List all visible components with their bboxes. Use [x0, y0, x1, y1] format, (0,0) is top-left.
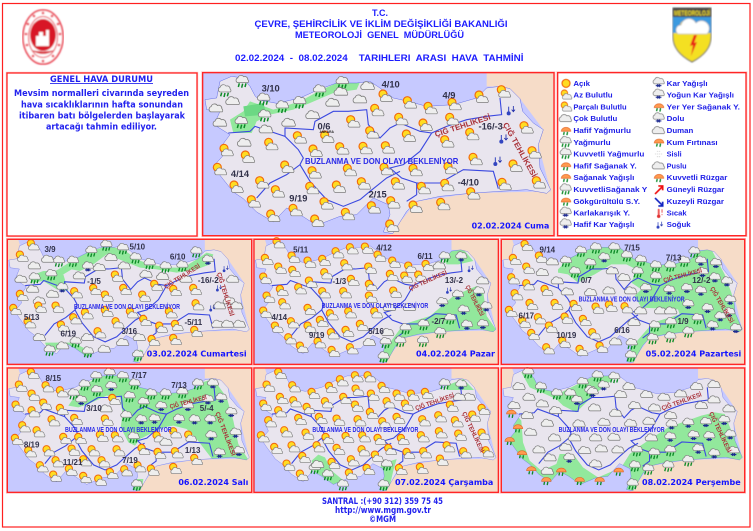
date label: 06.02.2024 Salı [178, 478, 249, 487]
map labels: 1/9 [677, 317, 689, 326]
text block: forecast summary: hava sıcaklıklarının hafta sonundan [21, 100, 183, 110]
map labels [312, 390, 487, 454]
map labels: -5/11 [184, 318, 203, 327]
map labels: ÇIĞ TEHLİKESİ [414, 390, 455, 412]
title lines: T.C. [372, 8, 388, 19]
map labels: 7/19 [122, 456, 138, 465]
map labels: 5/10 [130, 242, 146, 251]
legend labels: Hafif Kar Yağışlı [573, 220, 634, 229]
map labels: 3/16 [122, 327, 138, 336]
legend labels: Sıcak [667, 208, 687, 217]
title lines: METEOROLOJİ GENEL MÜDÜRLÜĞÜ [295, 29, 464, 41]
map labels: -16/-2 [198, 276, 219, 285]
date label: 02.02.2024 Cuma [472, 221, 549, 230]
legend labels [573, 79, 740, 229]
map labels: BUZLANMA VE DON OLAYI BEKLENİYOR [312, 426, 418, 434]
date label: 04.02.2024 Pazar [416, 349, 495, 358]
map: Turkey with rain area [9, 240, 249, 363]
map labels: 4/12 [376, 243, 392, 252]
map labels: 9/19 [289, 194, 307, 204]
footer contact [322, 497, 443, 525]
map: Turkey with rain area [256, 368, 496, 492]
header [23, 8, 711, 64]
map labels: ÇIĞ TEHLİKESİ [464, 284, 487, 317]
panel: map 06.02.2024 [7, 368, 252, 492]
text block: forecast summary: Mevsim normalleri civarında seyreden [14, 89, 189, 99]
text block: forecast summary: itibaren batı bölgelerden başlayarak [19, 112, 185, 122]
map labels: -2/7 [431, 317, 446, 326]
map labels: 9/19 [309, 331, 325, 340]
weather icons [11, 368, 245, 491]
map labels: ÇIĞ TEHLİKESİ [660, 389, 703, 412]
date label: 03.02.2024 Cumartesi [147, 349, 247, 358]
map: Turkey with rain and snow area [256, 238, 498, 363]
map labels: 5/11 [293, 245, 309, 254]
map labels: ÇIĞ TEHLİKESİ [662, 265, 703, 284]
map labels: ÇIĞ TEHLİKESİ [215, 271, 237, 317]
legend labels: Duman [667, 126, 694, 135]
map labels: 4/10 [382, 80, 400, 90]
footer contact: http://www.mgm.gov.tr [335, 506, 432, 516]
map labels: ÇIĞ TEHLİKESİ [707, 410, 734, 454]
legend labels: Sağanak Yağışlı [573, 173, 634, 182]
map labels: 6/17 [519, 311, 535, 320]
map labels: 5/16 [368, 327, 384, 336]
title lines: ÇEVRE, ŞEHİRCİLİK VE İKLİM DEĞİŞİKLİĞİ BAKANLIĞI [254, 18, 508, 30]
map labels [272, 243, 487, 340]
map labels: 2/15 [369, 190, 387, 200]
title lines [235, 8, 524, 64]
map labels: ÇIĞ TEHLİKESİ [162, 261, 202, 291]
legend labels: Kuvvetli Rüzgar [667, 173, 727, 182]
map labels: 8/15 [46, 374, 62, 383]
icon: meteorology shield [673, 8, 711, 62]
panel: general weather text [7, 73, 197, 236]
legend labels: Gökgürültülü S.Y. [573, 197, 640, 206]
map labels: BUZLANMA VE DON OLAYI BEKLENİYOR [559, 426, 665, 434]
map labels: 13/-2 [445, 276, 464, 285]
map labels: 10/19 [556, 331, 577, 340]
map labels: 7/15 [624, 243, 640, 252]
map: Turkey with rain and snow area [9, 368, 250, 492]
map labels: 3/9 [44, 245, 56, 254]
legend icons [559, 77, 664, 229]
weather icons [257, 368, 494, 491]
map labels: 3/10 [86, 404, 102, 413]
map labels: 6/11 [417, 252, 433, 261]
map labels: BUZLANMA VE DON OLAYI BEKLENİYOR [579, 295, 685, 303]
map labels: BUZLANMA VE DON OLAYI BEKLENİYOR [322, 302, 428, 310]
map labels [24, 371, 238, 467]
legend labels: Kar Yağışlı [667, 79, 708, 88]
map labels: 9/14 [540, 245, 556, 254]
map labels: 5/-4 [200, 404, 214, 413]
map labels: 4/14 [272, 313, 288, 322]
weather icons [209, 75, 546, 231]
map labels: BUZLANMA VE DON OLAYI BEKLENİYOR [65, 426, 172, 434]
map labels: 7/13 [666, 253, 682, 262]
legend labels: Hafif Yağmurlu [573, 126, 631, 135]
legend labels: Soğuk [667, 220, 691, 229]
map: Turkey with rain and snow area [503, 240, 745, 363]
panel: map 08.02.2024 [501, 367, 745, 492]
map labels [559, 389, 734, 454]
text block: forecast summary [14, 89, 189, 132]
map labels: 11/21 [63, 458, 83, 467]
legend labels: Puslu [667, 161, 687, 170]
map labels: BUZLANMA VE DON OLAYI BEKLENİYOR [305, 156, 458, 166]
map labels: 0/6 [318, 121, 330, 131]
weather icons [505, 367, 739, 490]
panel: main map 02.02.2024 [203, 73, 554, 236]
map labels: 7/13 [171, 381, 187, 390]
map labels: 3/10 [262, 84, 280, 94]
legend labels: Az Bulutlu [573, 90, 613, 99]
title lines: 02.02.2024 - 08.02.2024 TARIHLERI ARASI HAVA TAHMİNİ [235, 53, 524, 64]
date label: 08.02.2024 Perşembe [642, 478, 741, 487]
date label: 07.02.2024 Çarşamba [395, 478, 493, 487]
panel: legend [558, 73, 746, 236]
legend labels: Kum Fırtınası [667, 138, 718, 147]
text block: forecast summary: artacağı tahmin ediliyor. [46, 122, 157, 132]
date label: 05.02.2024 Pazartesi [646, 349, 742, 358]
legend labels: Yer Yer Sağanak Y. [667, 102, 740, 111]
legend labels: Parçalı Bulutlu [573, 102, 627, 111]
legend labels: Hafif Sağanak Y. [573, 161, 637, 170]
map labels: 8/19 [24, 440, 40, 449]
map labels: 5/13 [24, 313, 40, 322]
legend labels: KuvvetliSağanak Y [573, 185, 647, 194]
map labels: -4/10 [458, 177, 479, 187]
weather icons [260, 238, 492, 363]
map labels: ÇIĞ TEHLİKESİ [169, 392, 208, 411]
map labels [24, 242, 237, 338]
map labels: ÇIĞ TEHLİKESİ [407, 268, 448, 293]
weather icons [10, 240, 245, 361]
panel: map 04.02.2024 [254, 238, 498, 364]
map labels: ÇIĞ TEHLİKESİ [501, 121, 539, 179]
map labels [519, 243, 736, 340]
icon: meteorology shield: METEOROLOJİ [674, 10, 710, 18]
map labels: BUZLANMA VE DON OLAYI BEKLENİYOR [74, 303, 180, 311]
map labels: -16/-3 [478, 122, 503, 132]
footer contact: ©MGM [369, 515, 396, 525]
legend labels: Dolu [667, 114, 685, 123]
map labels: 4/14 [231, 169, 250, 179]
legend labels: Yağmurlu [573, 138, 611, 147]
map labels: ÇIĞ TEHLİKESİ [434, 112, 492, 139]
legend labels: Kuzeyli Rüzgar [667, 197, 724, 206]
map labels: -1/5 [87, 277, 101, 286]
legend labels: Açık [573, 79, 591, 88]
footer contact: SANTRAL :(+90 312) 359 75 45 [322, 497, 443, 507]
map: Turkey with rain and snow area [503, 367, 745, 492]
legend labels: Karlakarışık Y. [573, 208, 630, 217]
legend labels: Sisli [667, 149, 682, 158]
weather icons [505, 240, 742, 362]
panel: map 05.02.2024 [501, 239, 745, 364]
map labels: ÇIĞ TEHLİKESİ [213, 410, 238, 457]
map labels: 1/13 [185, 446, 201, 455]
panel: map 03.02.2024 [7, 239, 252, 364]
map labels: ÇIĞ TEHLİKESİ [460, 410, 487, 454]
map labels: ÇIĞ TEHLİKESİ [708, 285, 736, 325]
map labels: 12/-2 [692, 276, 711, 285]
legend labels: Kuvvetli Yağmurlu [573, 149, 645, 158]
map labels: -1/3 [332, 277, 347, 286]
icon: ministry emblem [23, 10, 63, 64]
heading: general weather: GENEL HAVA DURUMU [50, 75, 153, 85]
map labels: 6/19 [61, 329, 77, 338]
map labels: 6/16 [614, 326, 630, 335]
map labels [231, 80, 539, 204]
map: Turkey [205, 75, 551, 234]
legend labels: Güneyli Rüzgar [667, 185, 724, 194]
map labels: 4/9 [443, 90, 455, 100]
map labels: 0/7 [581, 276, 592, 285]
map labels: 6/10 [170, 252, 186, 261]
legend labels: Çok Bulutlu [573, 114, 618, 123]
map labels: ANKARA [319, 130, 334, 134]
map labels: 7/17 [131, 371, 147, 380]
legend labels: Yoğun Kar Yağışlı [667, 90, 734, 99]
panel: map 07.02.2024 [254, 368, 498, 492]
